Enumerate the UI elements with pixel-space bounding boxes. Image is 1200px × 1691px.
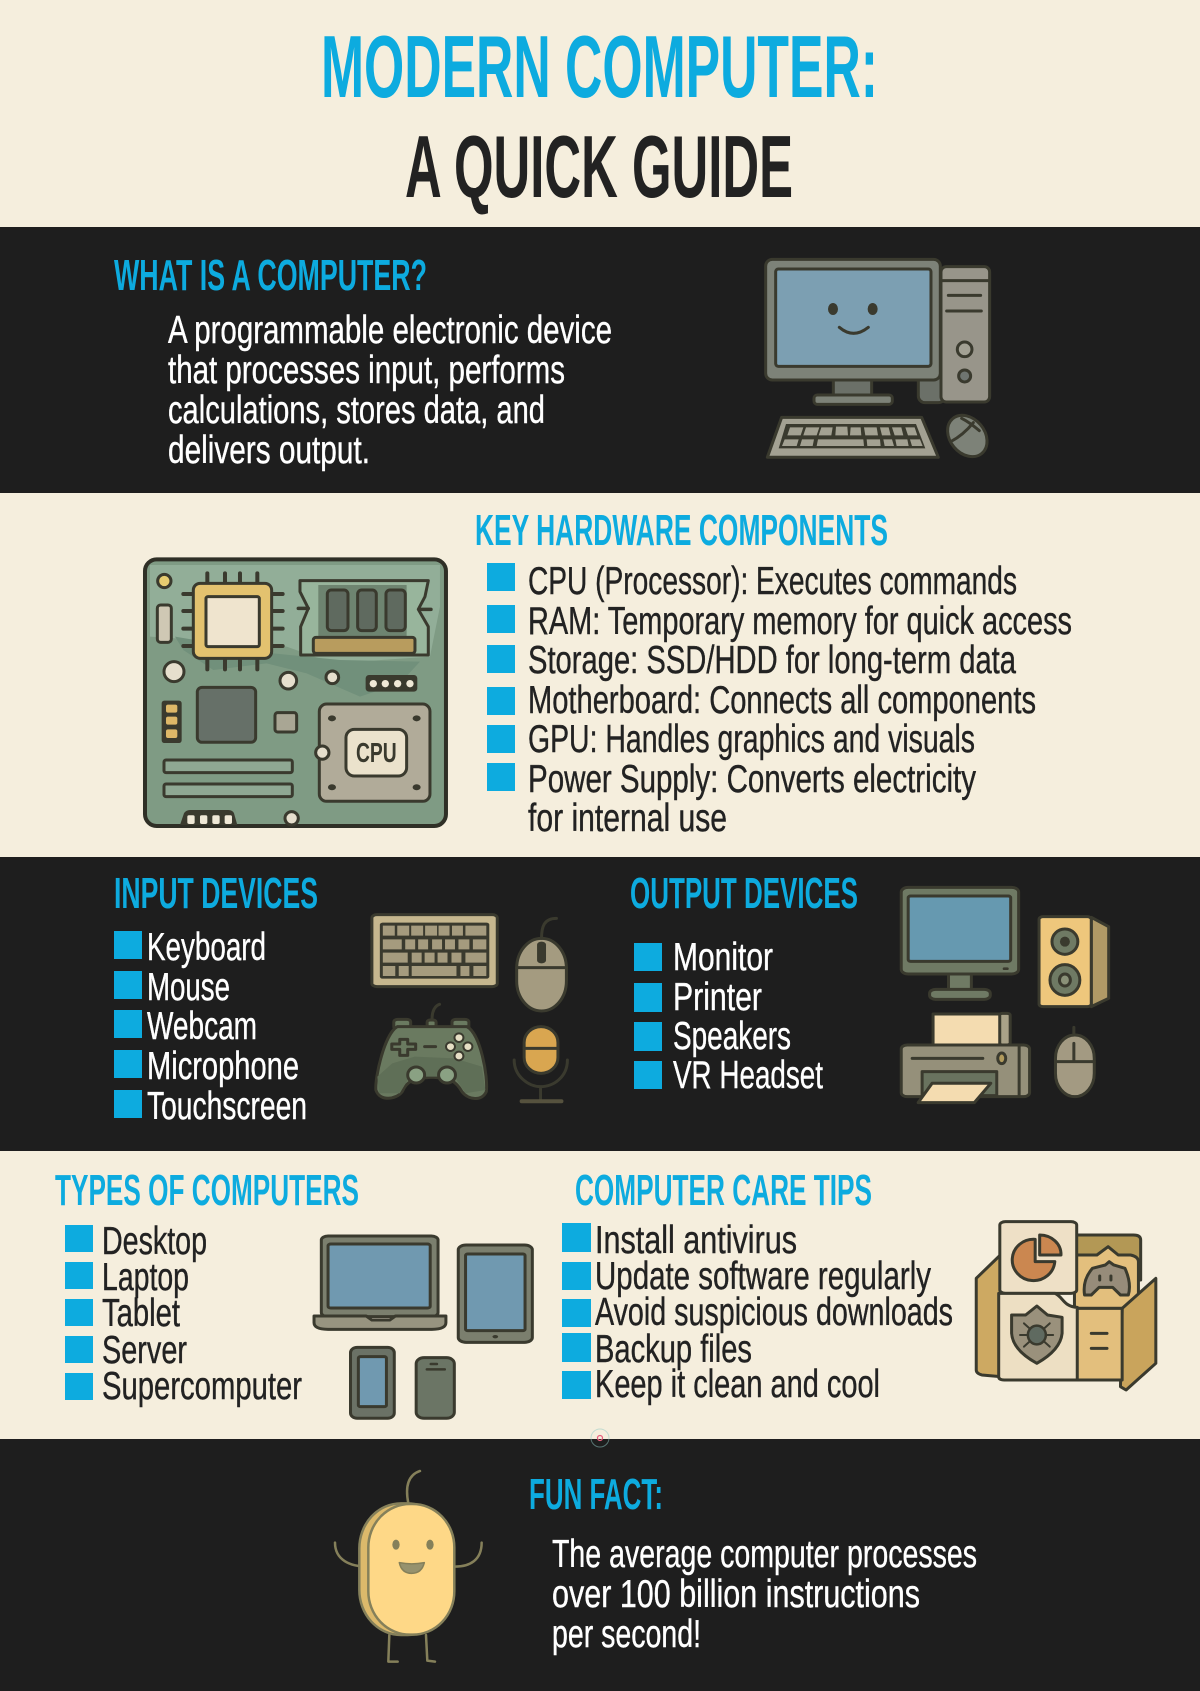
- heading: types of computers: TYPES OF COMPUTERS: [55, 1166, 359, 1215]
- list: computer care tips: Keep it clean and cool: [595, 1363, 880, 1406]
- heading: output devices: OUTPUT DEVICES: [630, 869, 858, 918]
- list: hardware components: for internal use: [528, 797, 727, 840]
- list: input devices: Keyboard: [147, 926, 266, 969]
- list: input devices: [114, 926, 307, 1128]
- icon: motherboard: CPU: [356, 737, 397, 768]
- list: types of computers: Supercomputer: [102, 1365, 302, 1408]
- icon: input devices: [372, 915, 567, 1101]
- icon: care box: [976, 1222, 1156, 1390]
- text block: definition: delivers output.: [168, 429, 370, 472]
- list: computer care tips: Backup files: [595, 1328, 752, 1371]
- heading: fun fact: FUN FACT:: [529, 1470, 663, 1519]
- list: output devices: [634, 936, 823, 1097]
- list: hardware components: [487, 560, 1072, 840]
- list: types of computers: Server: [102, 1329, 187, 1372]
- text block: fun fact: The average computer processes: [552, 1533, 977, 1576]
- heading: key hardware components: KEY HARDWARE COMPONENTS: [475, 506, 888, 555]
- panel: key hardware components: [145, 506, 1072, 840]
- list: computer care tips: Avoid suspicious downloads: [595, 1291, 953, 1334]
- list: hardware components: CPU (Processor): Executes commands: [528, 560, 1017, 603]
- list: computer care tips: Update software regularly: [595, 1255, 931, 1298]
- list: output devices: VR Headset: [673, 1054, 823, 1097]
- list: output devices: Printer: [673, 976, 762, 1019]
- heading: input devices: INPUT DEVICES: [114, 869, 318, 918]
- list: hardware components: Storage: SSD/HDD for long-term data: [528, 639, 1016, 682]
- list: hardware components: GPU: Handles graphics and visuals: [528, 718, 975, 761]
- list: output devices: Monitor: [673, 936, 773, 979]
- heading: what is a computer: WHAT IS A COMPUTER?: [114, 251, 427, 300]
- text block: fun fact: per second!: [552, 1613, 701, 1656]
- list: hardware components: Motherboard: Connects all components: [528, 679, 1036, 722]
- list: computer care tips: [562, 1219, 953, 1406]
- text block: fun fact: [552, 1533, 977, 1656]
- list: input devices: Touchscreen: [147, 1085, 307, 1128]
- text block: definition: calculations, stores data, and: [168, 389, 545, 432]
- list: types of computers: Laptop: [102, 1256, 189, 1299]
- list: types of computers: Desktop: [102, 1220, 207, 1263]
- panel: fun fact: [0, 1429, 1200, 1691]
- icon: mascot character: [335, 1471, 482, 1662]
- text block: definition: A programmable electronic device: [168, 309, 612, 352]
- title: A QUICK GUIDE: [405, 117, 793, 216]
- list: input devices: Mouse: [147, 966, 230, 1009]
- icon: computer types: [314, 1236, 532, 1418]
- list: input devices: Webcam: [147, 1005, 257, 1048]
- list: types of computers: [65, 1220, 302, 1408]
- icon: small watermark: [591, 1429, 609, 1447]
- list: types of computers: Tablet: [102, 1292, 180, 1335]
- icon: desktop computer: [766, 259, 995, 464]
- icon: motherboard: [145, 559, 446, 826]
- panel: what is a computer: [0, 227, 1200, 493]
- text block: fun fact: over 100 billion instructions: [552, 1573, 920, 1616]
- list: computer care tips: Install antivirus: [595, 1219, 797, 1262]
- list: output devices: Speakers: [673, 1015, 791, 1058]
- icon: output devices: [901, 887, 1109, 1103]
- text block: definition: that processes input, performs: [168, 349, 565, 392]
- list: hardware components: Power Supply: Converts electricity: [528, 758, 976, 801]
- list: input devices: Microphone: [147, 1045, 299, 1088]
- text block: definition: [168, 309, 612, 472]
- title: [321, 17, 878, 216]
- panel: input and output devices: [0, 857, 1200, 1151]
- panel: types and care: [55, 1166, 1156, 1418]
- heading: computer care tips: COMPUTER CARE TIPS: [575, 1166, 872, 1215]
